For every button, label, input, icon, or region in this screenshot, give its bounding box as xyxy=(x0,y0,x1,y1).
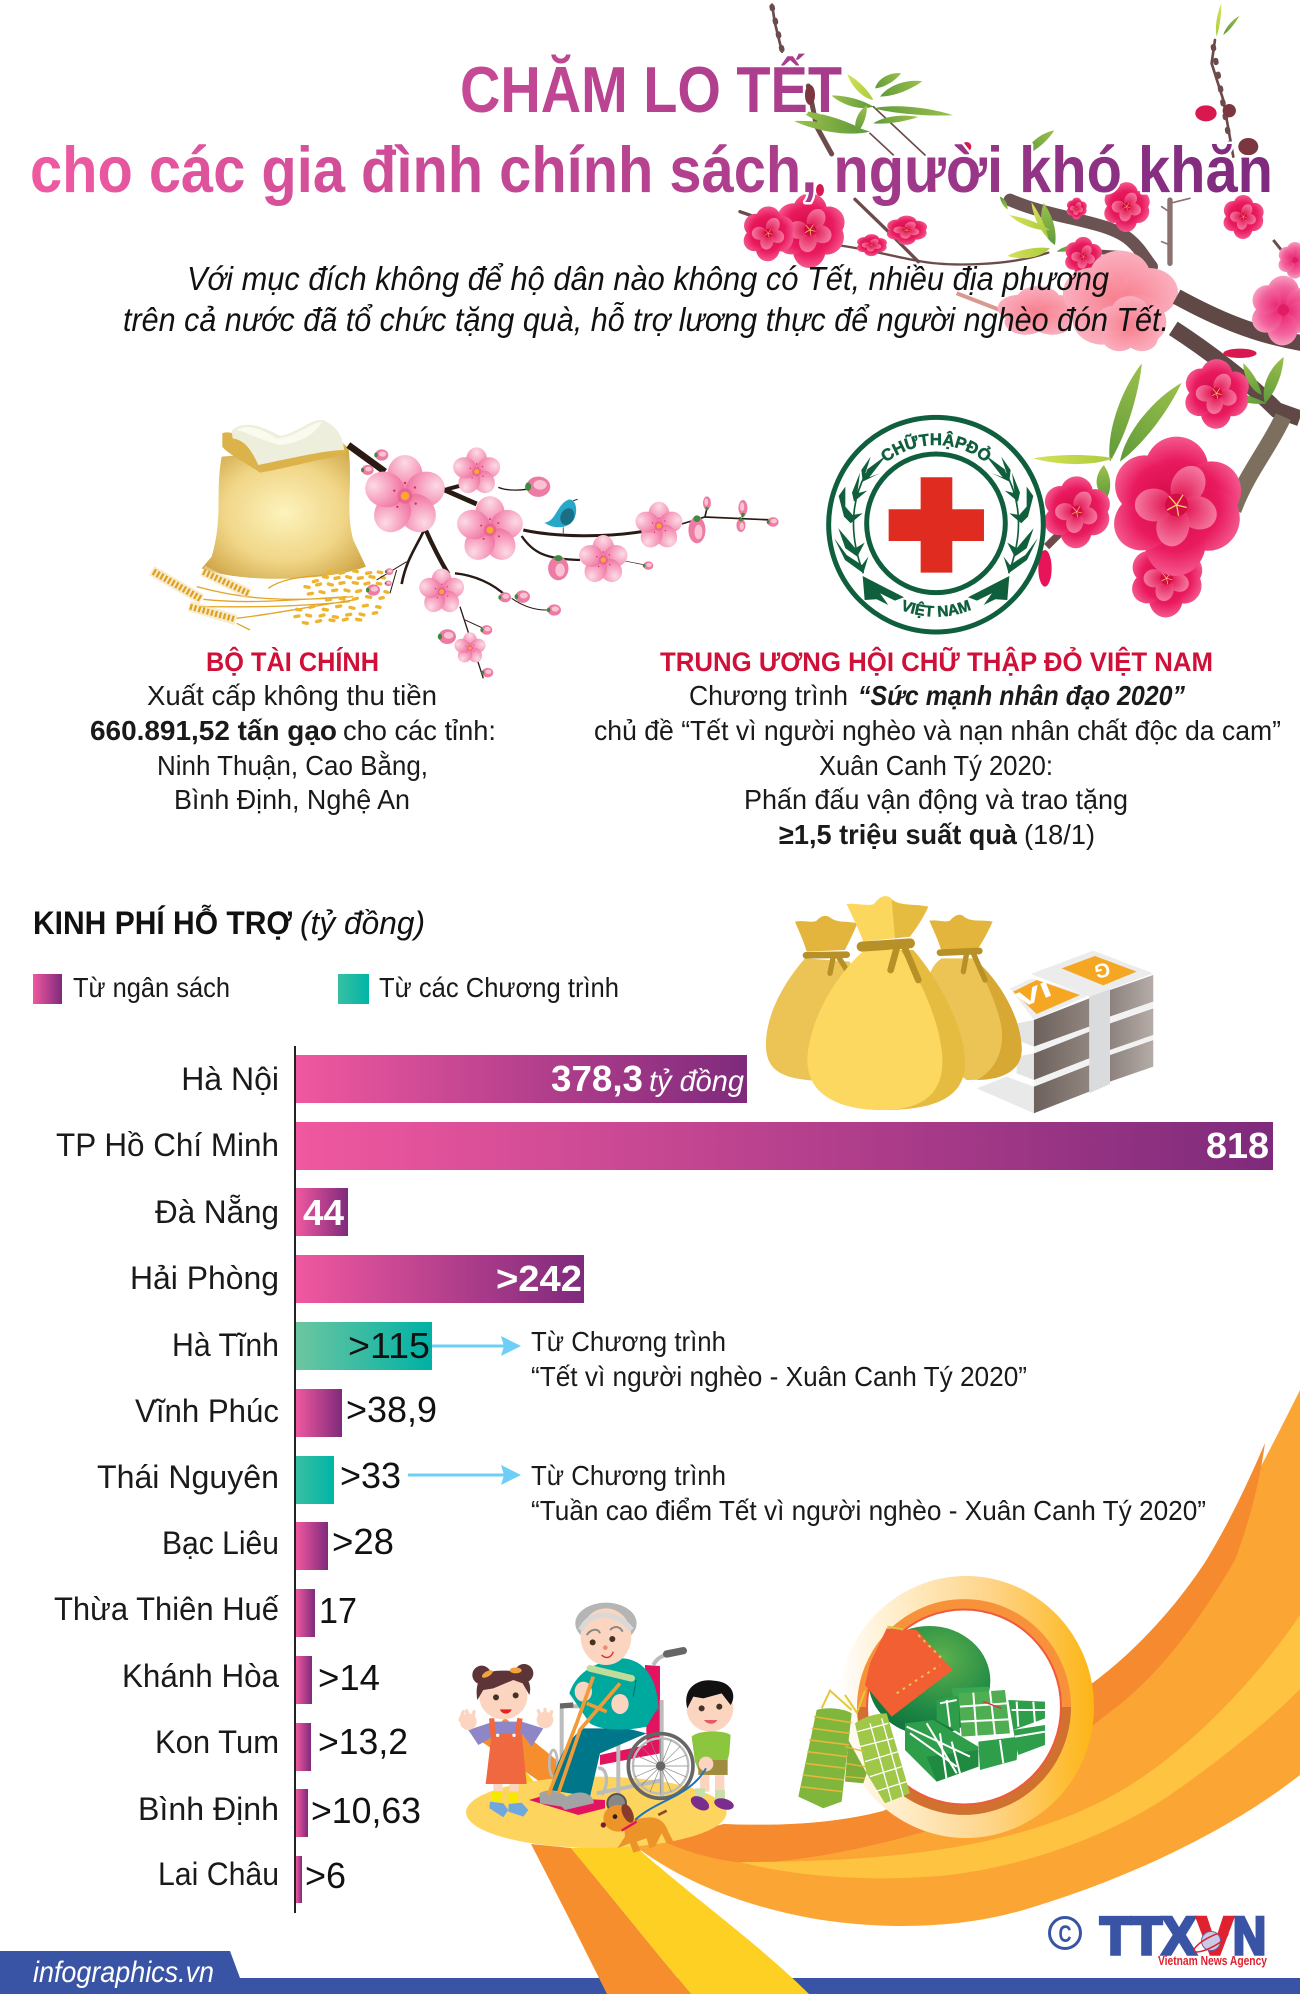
wordmark: N xyxy=(1233,1907,1266,1966)
body text: cho các tỉnh: xyxy=(343,715,496,746)
bar: Vĩnh Phúc: Vĩnh Phúc xyxy=(135,1393,279,1429)
illustration: rice sack with wheat xyxy=(152,420,388,630)
callout: Thái Nguyên programme xyxy=(531,1460,1206,1526)
copyright mark xyxy=(1050,1918,1080,1948)
illustration: money bags and banknotes: VI xyxy=(1012,976,1055,1013)
bar: Hà Tĩnh xyxy=(172,1322,432,1370)
red cross xyxy=(889,477,984,573)
body text xyxy=(90,680,496,815)
logo: TTXVN xyxy=(1050,1907,1268,1968)
body text: Phấn đấu vận động và trao tặng xyxy=(744,784,1128,815)
body text: Chương trình xyxy=(689,680,848,711)
illustration: money bags and banknotes xyxy=(766,896,1153,1113)
footer bar xyxy=(0,1951,1300,1994)
callout: Thái Nguyên programme: Từ Chương trình xyxy=(531,1460,726,1491)
intro text xyxy=(123,260,1169,338)
body text: ≥1,5 triệu suất quà xyxy=(779,819,1017,850)
bar: Kon Tum: >13,2 xyxy=(318,1721,408,1762)
bar: Hà Nội xyxy=(181,1055,747,1103)
wheelchair and elderly man xyxy=(529,1603,693,1815)
globe xyxy=(1192,1929,1230,1955)
bar: Lai Châu: >6 xyxy=(305,1855,346,1896)
watermelon xyxy=(868,1626,990,1735)
orange ribbon xyxy=(482,1390,1300,1994)
panel: Ministry of Finance xyxy=(90,646,496,815)
axis xyxy=(294,1046,296,1913)
legend: Từ các Chương trình xyxy=(379,972,619,1003)
arrow: Thái Nguyên note xyxy=(408,1465,521,1485)
arrow: Hà Tĩnh note xyxy=(432,1336,521,1356)
bar: Bình Định xyxy=(138,1789,421,1837)
ring with Tet food xyxy=(798,1576,1094,1838)
emblem lettering xyxy=(882,430,991,618)
bar: Hà Tĩnh: >115 xyxy=(348,1325,430,1366)
callout: Hà Tĩnh programme: Từ Chương trình xyxy=(531,1326,726,1357)
boy xyxy=(686,1680,735,1814)
body text: 660.891,52 tấn gạo xyxy=(90,715,337,746)
illustration: platform with people xyxy=(460,1603,735,1853)
bar: Kon Tum xyxy=(155,1721,408,1771)
emblem lettering: VIỆT NAM xyxy=(904,599,971,618)
wordmark: V xyxy=(1197,1907,1233,1966)
bar: Lai Châu xyxy=(158,1855,346,1903)
callout: Thái Nguyên programme: “Tuần cao điểm Tết vì người nghèo - Xuân Canh Tý 2020” xyxy=(531,1495,1206,1526)
bar: Thái Nguyên xyxy=(97,1455,401,1504)
emblem laurels xyxy=(834,455,1038,605)
bar: Hà Nội: tỷ đồng xyxy=(649,1065,744,1098)
intro text: Với mục đích không để hộ dân nào không có Tết, nhiều địa phương xyxy=(187,260,1110,297)
bar: Kon Tum: Kon Tum xyxy=(155,1724,279,1760)
title: CHĂM LO TẾT xyxy=(460,53,842,126)
bar: Hà Tĩnh: Hà Tĩnh xyxy=(172,1327,279,1363)
bar: Khánh Hòa: Khánh Hòa xyxy=(122,1658,279,1694)
bar: Vĩnh Phúc: >38,9 xyxy=(346,1389,437,1430)
chart heading: (tỷ đồng) xyxy=(300,905,425,941)
peach branch: top right xyxy=(739,3,1300,618)
bar: Hải Phòng: >242 xyxy=(496,1258,582,1299)
heading: TRUNG ƯƠNG HỘI CHỮ THẬP ĐỎ VIỆT NAM xyxy=(660,645,1213,677)
intro text: trên cả nước đã tổ chức tặng quà, hỗ trợ lương thực để người nghèo đón Tết. xyxy=(123,301,1169,338)
bar: Bạc Liêu xyxy=(162,1521,394,1570)
food group xyxy=(798,1626,1045,1808)
body text: Bình Định, Nghệ An xyxy=(174,784,410,815)
ring xyxy=(838,1576,1094,1838)
bar: TP Hồ Chí Minh xyxy=(56,1122,1273,1170)
bar chart xyxy=(54,1046,1273,1913)
bar: Khánh Hòa: >14 xyxy=(318,1657,380,1698)
bar: Vĩnh Phúc xyxy=(135,1389,437,1437)
legend xyxy=(33,972,619,1004)
bar: Thừa Thiên Huế xyxy=(54,1589,357,1637)
bar: Thừa Thiên Huế: Thừa Thiên Huế xyxy=(54,1591,279,1627)
bar: Đà Nẵng: 44 xyxy=(303,1192,344,1233)
bar: Khánh Hòa xyxy=(122,1656,380,1704)
wordmark: TTX xyxy=(1100,1907,1196,1966)
copyright mark: C xyxy=(1058,1921,1072,1948)
heading: BỘ TÀI CHÍNH xyxy=(206,646,379,677)
rolled rice cakes xyxy=(845,1740,867,1783)
callout: Hà Tĩnh programme xyxy=(531,1326,1027,1392)
legend: Từ ngân sách xyxy=(73,972,230,1003)
body text xyxy=(594,680,1281,850)
bar: Thái Nguyên: Thái Nguyên xyxy=(97,1459,279,1495)
bar: Bạc Liêu: Bạc Liêu xyxy=(162,1525,279,1561)
emblem lettering: CHỮTHẬPĐỎ xyxy=(882,430,991,460)
square rice cakes xyxy=(905,1687,1045,1782)
callout: Hà Tĩnh programme: “Tết vì người nghèo - Xuân Canh Tý 2020” xyxy=(531,1361,1027,1392)
bar: Bình Định: >10,63 xyxy=(311,1790,421,1831)
bar: Hải Phòng xyxy=(130,1255,584,1303)
body text: (18/1) xyxy=(1024,819,1095,850)
bar: Bình Định: Bình Định xyxy=(138,1791,279,1827)
bar: TP Hồ Chí Minh: TP Hồ Chí Minh xyxy=(56,1127,279,1163)
dog xyxy=(601,1768,706,1853)
body text: Xuân Canh Tý 2020: xyxy=(819,750,1053,781)
body text: chủ đề “Tết vì người nghèo và nạn nhân chất độc da cam” xyxy=(594,715,1281,746)
title xyxy=(30,53,1273,206)
crutches xyxy=(548,1677,620,1795)
illustration: Red Cross emblem xyxy=(826,414,1046,634)
bar: Thừa Thiên Huế: 17 xyxy=(319,1590,357,1631)
red tag xyxy=(865,1628,953,1717)
wordmark xyxy=(1100,1907,1266,1966)
panel: Vietnam Red Cross xyxy=(594,645,1281,850)
body text: Xuất cấp không thu tiền xyxy=(147,680,437,711)
bar: Bạc Liêu: >28 xyxy=(332,1521,394,1562)
agency name: Vietnam News Agency xyxy=(1158,1953,1268,1968)
illustration: money bags and banknotes: G xyxy=(1093,958,1112,982)
girl xyxy=(460,1664,553,1817)
footer site name: infographics.vn xyxy=(33,1956,214,1989)
bar: Đà Nẵng: Đà Nẵng xyxy=(155,1194,279,1230)
bar: Lai Châu: Lai Châu xyxy=(158,1856,279,1892)
chart heading: KINH PHÍ HỖ TRỢ xyxy=(33,905,293,941)
bar: Thái Nguyên: >33 xyxy=(340,1455,401,1496)
body text: Ninh Thuận, Cao Bằng, xyxy=(157,750,428,781)
body text: “Sức mạnh nhân đạo 2020” xyxy=(858,680,1185,711)
bar: Đà Nẵng xyxy=(155,1188,348,1236)
bar: TP Hồ Chí Minh: 818 xyxy=(1206,1125,1269,1166)
platform xyxy=(466,1777,727,1848)
bar: Hà Nội: 378,3 xyxy=(551,1058,643,1099)
bar: Hà Nội: Hà Nội xyxy=(181,1061,279,1097)
bar: Hải Phòng: Hải Phòng xyxy=(130,1260,279,1296)
illustration: blossom branch with bird xyxy=(348,445,779,678)
